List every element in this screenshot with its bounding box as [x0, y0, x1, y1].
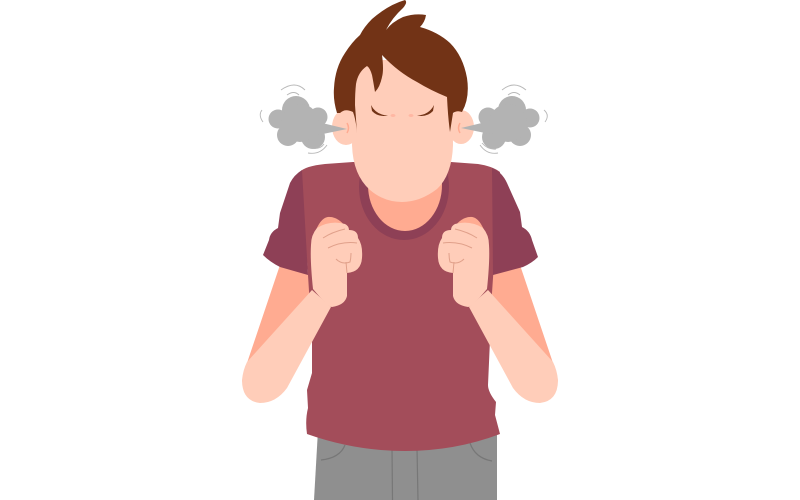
- left closed eye: [371, 105, 388, 116]
- right closed eye: [417, 105, 434, 116]
- left ear: [332, 109, 360, 145]
- hair: [334, 0, 468, 133]
- right ear: [448, 110, 474, 144]
- right sleeve: [492, 168, 538, 275]
- pants: [314, 430, 497, 500]
- right steam cloud: [461, 96, 540, 149]
- neck: [368, 139, 442, 231]
- right upper arm: [488, 265, 553, 363]
- left upper arm: [247, 265, 312, 363]
- left steam cloud: [268, 96, 347, 149]
- collar: [359, 134, 449, 240]
- left fist: [311, 217, 362, 307]
- nose marks: [390, 114, 414, 117]
- t-shirt: [263, 134, 538, 451]
- face: [352, 60, 453, 202]
- left sleeve: [263, 170, 308, 275]
- motion arcs: [260, 85, 547, 153]
- right fist: [438, 217, 489, 307]
- right forearm: [469, 290, 558, 403]
- left forearm: [242, 290, 331, 403]
